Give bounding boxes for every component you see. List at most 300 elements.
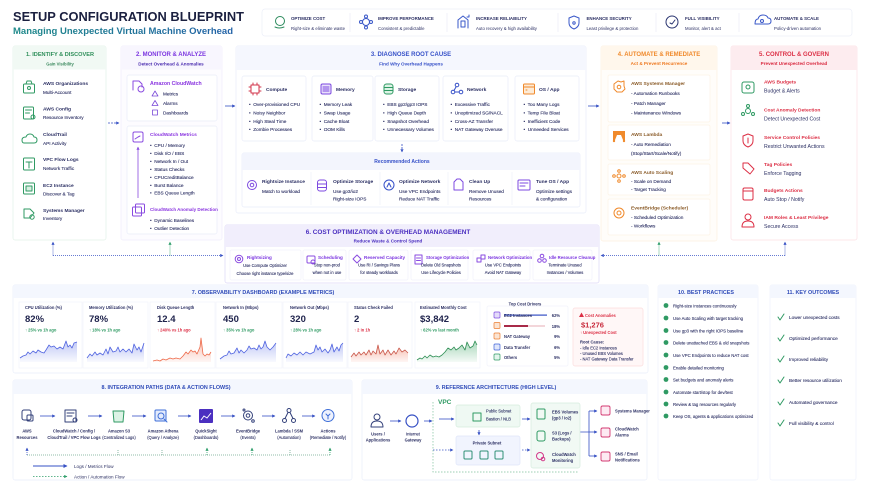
cost anomalies callout <box>573 308 643 366</box>
action: optimize storage <box>318 179 373 202</box>
heading <box>136 52 206 66</box>
metric: memory utilization <box>83 302 148 368</box>
card: AWS Systems Manager: - Patch Manager <box>631 101 666 106</box>
action: rightsize instance <box>248 179 305 194</box>
item: AWS Config <box>24 106 84 120</box>
heading: 9. REFERENCE ARCHITECTURE (HIGH LEVEL) <box>436 385 556 391</box>
panel 11: key outcomes <box>770 285 856 480</box>
arrow: step 4 to step 5 <box>722 122 730 124</box>
VPC boundary: VPC <box>438 399 452 406</box>
top cost drivers: EC2 Instances <box>504 313 533 318</box>
dotted feedback <box>27 448 330 455</box>
node: CloudWatch / Config: CloudTrail / VPC Flow Logs <box>47 435 101 440</box>
card: scheduling: Stop non-prod <box>314 262 341 268</box>
card: AWS Auto Scaling: - Target Tracking <box>631 187 666 192</box>
panel 6: cost optimization <box>225 225 599 283</box>
item: Service Control Policies: Restrict Unwanted Actions <box>764 144 825 150</box>
card: network optimization: Network Optimization <box>488 255 533 260</box>
action: optimize network <box>384 179 441 202</box>
benefit: full visibility: FULL VISIBILITY <box>685 16 720 21</box>
action: optimize network: Reduce NAT Traffic <box>399 196 440 202</box>
VPC boundary <box>433 399 579 472</box>
card: AWS Lambda: AWS Lambda <box>631 132 663 138</box>
metric: disk queue length: 12.4 <box>157 314 176 325</box>
benefit: increase reliability: Auto recovery & high availability <box>476 26 538 31</box>
heading: 11. KEY OUTCOMES <box>787 290 840 296</box>
card: AWS Systems Manager: - Automation Runbooks <box>631 91 680 96</box>
benefit: automate and scale <box>755 15 822 31</box>
item: Service Control Policies: Service Control Policies <box>764 135 820 141</box>
panel 10: best practices: Use gp3 with the right IOPS baseline <box>673 328 744 334</box>
heading <box>759 52 829 66</box>
heading <box>26 52 94 66</box>
card: AWS Auto Scaling: AWS Auto Scaling <box>631 170 673 176</box>
card: OS and app: OS / App <box>539 87 559 93</box>
card: rightsizing <box>230 250 301 280</box>
action: rightsize instance: Match to workload <box>262 189 300 194</box>
top cost drivers: 18% <box>552 324 560 329</box>
item: Systems Manager <box>24 208 85 221</box>
card: compute: • Zombie Processes <box>249 127 293 132</box>
card: CloudWatch Metrics and anomaly detection <box>127 126 218 234</box>
target: Systems Manager <box>601 406 650 415</box>
benefit: automate and scale: Policy-driven automation <box>774 26 822 31</box>
action: optimize network: Use VPC Endpoints <box>399 189 441 194</box>
public subnet <box>456 405 520 427</box>
action: optimize storage: Optimize Storage <box>333 179 373 185</box>
node: AWS resources: AWS <box>22 428 32 434</box>
card: reserved capacity: Reserved Capacity <box>364 255 406 260</box>
action: tune OS and app: Optimize settings <box>536 189 573 194</box>
card: memory: • OOM Kills <box>320 127 345 132</box>
metric: status check failed: 2 <box>354 314 359 325</box>
panel 4: automate and remediate <box>601 46 717 241</box>
card: rightsizing: Rightsizing <box>247 255 272 260</box>
panel 5: control and govern <box>731 46 857 240</box>
benefit: increase reliability: INCREASE RELIABILITY <box>476 16 527 21</box>
card: compute: Compute <box>266 87 287 93</box>
cost anomalies callout: - Idle EC2 Instances <box>580 346 617 350</box>
card: storage optimization: Delete Old Snapshots <box>421 262 461 268</box>
benefit: enhance security: Least privilege & protection <box>586 26 639 31</box>
action: optimize storage: Use gp3/io2 <box>333 189 358 194</box>
card: CloudWatch Metrics and anomaly detection: CloudWatch Anomaly Detection <box>150 207 218 212</box>
action: tune OS and app <box>518 179 573 202</box>
card: CloudWatch Metrics and anomaly detection: CloudWatch Metrics <box>150 132 197 138</box>
card: compute <box>242 76 306 141</box>
node: Amazon Athena: Amazon Athena <box>148 428 179 434</box>
action: tune OS and app: Tune OS / App <box>536 179 569 185</box>
card: compute: • Over-provisioned CPU <box>249 102 301 107</box>
target: CloudWatch Alarms <box>601 426 639 438</box>
card: CloudWatch Metrics and anomaly detection: • Network In / Out <box>150 159 189 164</box>
benefit: improve performance: Consistent & predictable <box>378 26 425 31</box>
heading: 4. AUTOMATE & REMEDIATE <box>618 52 700 58</box>
users: Applications <box>366 438 391 442</box>
panel 10: best practices <box>658 285 758 480</box>
card: AWS Lambda <box>608 125 710 160</box>
panel 8: integration paths <box>13 380 352 480</box>
item: Service Control Policies <box>743 134 825 150</box>
heading <box>306 229 470 244</box>
metric: estimated monthly cost: Estimated Monthly Cost <box>420 305 467 310</box>
metric: network out: 320 <box>290 314 306 325</box>
node: Amazon S3: (Centralized Logs) <box>102 435 136 440</box>
card: Amazon CloudWatch: Amazon CloudWatch <box>150 81 202 87</box>
target: Systems Manager: Systems Manager <box>615 408 650 414</box>
card: network: • Cross-AZ Transfer <box>450 119 493 124</box>
item: VPC Flow Logs: Network Traffic <box>43 166 75 171</box>
node: EventBridge <box>236 409 261 440</box>
benefit: optimize cost: Right-size & eliminate waste <box>291 26 346 31</box>
benefit: enhance security: ENHANCE SECURITY <box>586 16 632 21</box>
card: network optimization: Use VPC Endpoints <box>485 262 521 268</box>
node: Amazon S3 <box>102 411 136 440</box>
item: Systems Manager: Inventory <box>43 216 63 221</box>
outcome labels: Improved reliability <box>789 357 829 362</box>
card: AWS Lambda: - Auto Remediation <box>631 142 671 147</box>
item: Systems Manager: Systems Manager <box>43 208 85 214</box>
action: optimize network: Optimize Network <box>399 179 441 185</box>
item: AWS Budgets <box>742 80 800 94</box>
heading <box>371 52 451 66</box>
metric: network out: ↑ 28% vs 1h ago <box>290 328 322 332</box>
metric: memory utilization: ↑ 18% vs 1h ago <box>89 328 121 332</box>
arrow: left feedback loop <box>53 242 223 256</box>
public subnet: Public Subnet <box>486 408 512 414</box>
item: AWS Organizations <box>24 81 88 95</box>
card: OS and app: • Temp File Bloat <box>524 110 561 116</box>
metric: network out: Network Out (Mbps) <box>290 305 330 310</box>
metric: network in: Network In (Mbps) <box>223 305 259 310</box>
metric: CPU utilization: CPU Utilization (%) <box>25 305 62 310</box>
card: idle resource cleanup: Idle Resource Cleanup <box>549 255 596 260</box>
internet gateway: Internet <box>406 432 421 436</box>
panel 10: best practices: Enable detailed monitoring <box>673 366 724 370</box>
legend: Action / Automation Flow <box>74 474 125 480</box>
flow arrows <box>40 415 315 417</box>
card: storage optimization: Use Lifecycle Policies <box>421 270 461 275</box>
card: storage: • EBS gp2/gp3 IOPS <box>383 102 427 107</box>
metric: disk queue length <box>150 302 215 368</box>
arrow: step 1 to step 2 <box>108 122 119 124</box>
heading: 3. DIAGNOSE ROOT CAUSE <box>371 52 451 58</box>
action: rightsize instance: Rightsize Instance <box>262 179 305 185</box>
card: storage: • Unnecessary Volumes <box>383 127 435 132</box>
card: storage: Storage <box>398 87 416 93</box>
item: AWS Budgets: AWS Budgets <box>764 80 796 86</box>
cost anomalies callout: ↑ Unexpected Cost <box>580 330 617 335</box>
target: SNS / Email: SNS / Email <box>615 452 638 456</box>
card: OS and app <box>515 76 579 141</box>
card: CloudWatch Metrics and anomaly detection: • Disk I/O / EBS <box>150 151 184 156</box>
node: CloudWatch / Config <box>47 410 101 440</box>
public subnet: Bastion / NLB <box>486 416 511 422</box>
card: AWS Auto Scaling <box>608 164 710 195</box>
benefits strip <box>262 9 852 36</box>
panel 10: best practices: Set budgets and anomaly alerts <box>673 378 733 382</box>
node: AWS resources: Resources <box>17 435 38 440</box>
benefit: improve performance <box>360 15 434 31</box>
panel 9: reference architecture <box>362 380 650 480</box>
top cost drivers: 9% <box>554 334 560 339</box>
top cost drivers: 5% <box>554 355 560 360</box>
top cost drivers: 62% <box>552 313 560 318</box>
metric: status check failed: ↑ 2 in 1h <box>354 328 371 332</box>
card: idle resource cleanup <box>533 250 596 280</box>
metric: memory utilization: 78% <box>89 314 109 325</box>
card: scheduling: when not in use <box>313 270 342 275</box>
item: VPC Flow Logs: VPC Flow Logs <box>43 157 79 163</box>
private subnet <box>456 436 520 465</box>
internet gateway: Gateway <box>405 438 422 442</box>
users <box>366 414 391 442</box>
card: OS and app: • Unneeded Services <box>524 127 569 132</box>
metric: estimated monthly cost: $3,842 <box>420 314 449 325</box>
metric: network in: 450 <box>223 314 239 325</box>
item: AWS Budgets: Budget & Alerts <box>764 88 800 94</box>
card: Amazon CloudWatch: Metrics <box>163 92 179 96</box>
action: optimize storage: Right-size IOPS <box>333 196 366 202</box>
item: Budgets Actions <box>743 188 805 203</box>
outcome checks <box>778 314 784 426</box>
panel 10: best practices: Right-size instances continuously <box>673 304 737 308</box>
item: Tag Policies <box>743 162 802 177</box>
card: memory: • Memory Leak <box>320 102 353 107</box>
item: EC2 Instance: Discover & Tag <box>43 192 75 196</box>
arrow: causes to actions <box>401 144 403 152</box>
item: IAM Roles: IAM Roles & Least Privilege <box>764 215 829 221</box>
legend: Logs / Metrics Flow <box>74 464 114 469</box>
item: Cost Anomaly Detection: Detect Unexpected Cost <box>764 116 821 122</box>
arrow: right feedback loop <box>601 242 785 256</box>
metric: status check failed: Status Check Failed <box>354 305 393 310</box>
panel 10: best practices: Keep OS, agents & applications optimized <box>673 414 754 419</box>
card: EventBridge: EventBridge (Scheduler) <box>631 206 688 212</box>
card: idle resource cleanup: Instances / Volumes <box>547 270 583 275</box>
metric: CPU utilization <box>19 302 82 368</box>
node: QuickSight: (Dashboards) <box>194 435 219 440</box>
metric: network in <box>216 302 282 368</box>
item: IAM Roles <box>742 214 829 230</box>
card: network: Network <box>467 87 487 93</box>
heading: 1. IDENTIFY & DISCOVER <box>26 52 94 58</box>
storage and monitoring group: S3 (Logs / <box>552 430 572 436</box>
heading: Gain Visibility <box>46 62 74 66</box>
card: CloudWatch Metrics and anomaly detection: • CPUCreditBalance <box>150 175 194 180</box>
node: actions: Actions <box>320 428 336 434</box>
heading: Reduce Waste & Control Spend <box>354 238 423 244</box>
action: clean up: Clean Up <box>469 179 490 185</box>
card: OS and app: • Inefficient Code <box>524 119 561 124</box>
outcome labels: Better resource utilization <box>789 378 842 383</box>
benefit: full visibility <box>666 16 722 31</box>
node: Amazon S3: Amazon S3 <box>108 428 131 434</box>
heading: 10. BEST PRACTICES <box>678 290 734 296</box>
node: AWS resources <box>17 410 38 440</box>
storage and monitoring group: Monitoring <box>552 458 574 463</box>
panel 10: best practices: Review & tag resources regularly <box>673 402 737 407</box>
node: Amazon Athena <box>147 410 179 440</box>
card: scheduling: Scheduling <box>318 255 343 260</box>
cost anomalies callout: - Unused EBS Volumes <box>580 351 623 356</box>
card: AWS Systems Manager: AWS Systems Manager <box>631 81 685 87</box>
metric: estimated monthly cost <box>415 302 480 368</box>
benefit: enhance security <box>569 16 639 31</box>
card: reserved capacity: Use RI / Savings Plans <box>358 262 400 268</box>
node: QuickSight: QuickSight <box>195 428 217 434</box>
target: SNS / Email: Notifications <box>615 458 641 462</box>
benefit: optimize cost <box>275 16 346 31</box>
arrows <box>390 411 597 456</box>
node: Lambda / SSM: (Automation) <box>277 435 301 440</box>
action: clean up: Remove Unused <box>469 189 504 194</box>
top cost drivers: Data Transfer <box>504 345 531 350</box>
action: tune OS and app: & configuration <box>536 196 568 202</box>
node: QuickSight <box>194 409 219 440</box>
benefit: automate and scale: AUTOMATE & SCALE <box>774 16 819 21</box>
item: Tag Policies: Enforce Tagging <box>764 171 802 177</box>
action: clean up: Resources <box>469 196 492 202</box>
target: CloudWatch Alarms: CloudWatch <box>615 426 639 432</box>
panel 2: monitor and analyze <box>121 46 222 240</box>
storage and monitoring group: Backups) <box>552 436 571 442</box>
metric: estimated monthly cost: ↑ 62% vs last month <box>420 328 459 332</box>
title: SETUP CONFIGURATION BLUEPRINT <box>13 9 244 24</box>
outcome labels: Lower unexpected costs <box>789 315 840 320</box>
card: CloudWatch Metrics and anomaly detection: • Dynamic Baselines <box>150 218 195 223</box>
users: Users / <box>371 432 386 436</box>
node: CloudWatch / Config: CloudWatch / Config / <box>53 428 96 434</box>
benefit: increase reliability <box>458 15 538 31</box>
cost anomalies callout: Root Cause: <box>580 340 604 344</box>
item: AWS Config: Resource Inventory <box>43 115 84 120</box>
check list <box>664 303 668 418</box>
card: Amazon CloudWatch <box>127 75 217 121</box>
heading: 6. COST OPTIMIZATION & OVERHEAD MANAGEMENT <box>306 229 470 236</box>
top cost drivers: NAT Gateway <box>504 334 531 339</box>
node: Amazon Athena: (Query / Analyze) <box>147 435 179 440</box>
storage and monitoring group: (gp3 / io2) <box>552 416 572 420</box>
arrow: step 3 to step 4 <box>588 105 599 107</box>
metric: CPU utilization: 82% <box>25 314 45 325</box>
outcome labels: Optimized performance <box>789 336 838 341</box>
card: AWS Systems Manager <box>608 75 710 122</box>
card: network <box>443 76 508 141</box>
heading: Act & Prevent Recurrence <box>631 61 688 66</box>
card: CloudWatch Metrics and anomaly detection: • Burst Balance <box>150 183 184 188</box>
item: AWS Organizations: AWS Organizations <box>43 81 88 87</box>
card: storage <box>375 76 439 141</box>
heading: Detect Overhead & Anomalies <box>138 62 204 66</box>
private subnet: Private Subnet <box>473 440 502 446</box>
heading: 7. OBSERVABILITY DASHBOARD (EXAMPLE METRICS) <box>192 290 334 296</box>
benefit: full visibility: Monitor, alert & act <box>685 26 722 31</box>
item: Tag Policies: Tag Policies <box>764 162 792 168</box>
panel 10: best practices: Use Auto Scaling with target tracking <box>673 316 744 321</box>
card: compute: • Noisy Neighbor <box>249 110 286 116</box>
card: rightsizing: Choose right instance type/size <box>237 271 294 276</box>
item: Cost Anomaly Detection <box>742 104 821 122</box>
card: memory: • Cache Bloat <box>320 119 350 124</box>
card: OS and app: • Too Many Logs <box>524 102 560 107</box>
node: actions: (Remediate / Notify) <box>310 435 347 440</box>
card: network: • NAT Gateway Overuse <box>450 127 503 132</box>
storage and monitoring group: CloudWatch <box>552 452 576 457</box>
metric: disk queue length: Disk Queue Length <box>157 305 195 310</box>
internet gateway <box>405 415 422 442</box>
card: scheduling <box>303 250 346 280</box>
item: CloudTrail: API Activity <box>43 141 67 146</box>
card: CloudWatch Metrics and anomaly detection: • CPU / Memory <box>150 143 186 148</box>
panel 7: observability dashboard <box>13 285 648 373</box>
item: EC2 Instance <box>24 183 75 196</box>
top cost drivers: Top Cost Drivers <box>509 302 542 306</box>
card: storage optimization: Storage Optimization <box>426 255 470 260</box>
card: storage: • High Queue Depth <box>383 110 426 116</box>
item: AWS Config: AWS Config <box>43 106 71 112</box>
card: reserved capacity <box>349 250 408 280</box>
top cost drivers: 6% <box>554 345 560 350</box>
item: CloudTrail: CloudTrail <box>43 132 68 138</box>
item: Cost Anomaly Detection: Cost Anomaly Detection <box>764 108 820 114</box>
card: Amazon CloudWatch: Dashboards <box>163 110 189 116</box>
item: VPC Flow Logs <box>24 157 79 171</box>
panel 10: best practices: Delete unattached EBS & old snapshots <box>673 340 749 346</box>
outcome labels: Full visibility & control <box>789 421 834 426</box>
benefit: improve performance: IMPROVE PERFORMANCE <box>378 16 434 21</box>
item: Budgets Actions: Auto Stop / Notify <box>764 197 805 203</box>
card: rightsizing: Use Compute Optimizer <box>243 263 287 268</box>
heading: Prevent Unexpected Overhead <box>761 61 828 66</box>
storage and monitoring group <box>531 403 580 468</box>
card: compute: • High Steal Time <box>249 119 287 124</box>
card: CloudWatch Metrics and anomaly detection: • Status Checks <box>150 167 185 172</box>
cost anomalies callout: $1,276 <box>581 320 604 330</box>
heading: Find Why Overhead Happens <box>379 62 443 66</box>
card: AWS Systems Manager: - Maintenance Windows <box>631 110 682 116</box>
top cost drivers <box>487 302 568 366</box>
card: memory: Memory <box>336 87 355 93</box>
item: CloudTrail <box>22 132 68 146</box>
card: network: • Unoptimized SG/NACL <box>450 110 503 116</box>
panel 3: diagnose root cause <box>236 46 586 213</box>
heading: 5. CONTROL & GOVERN <box>759 52 829 58</box>
legend <box>33 464 125 480</box>
cost anomalies callout: Cost Anomalies <box>585 313 617 318</box>
card: memory <box>312 76 373 141</box>
card: network optimization: Avoid NAT Gateway <box>485 270 522 275</box>
heading: 2. MONITOR & ANALYZE <box>136 52 206 58</box>
recommended actions <box>242 153 580 207</box>
item: Budgets Actions: Budgets Actions <box>764 188 803 194</box>
metric: CPU utilization: ↑ 25% vs 1h ago <box>25 328 57 332</box>
item: EC2 Instance: EC2 Instance <box>43 183 74 189</box>
card: storage: • Snapshot Overhead <box>383 119 429 124</box>
metric: disk queue length: ↑ 240% vs 1h ago <box>157 328 191 332</box>
panel 10: best practices: Use VPC Endpoints to reduce NAT cost <box>673 353 749 358</box>
heading: 8. INTEGRATION PATHS (DATA & ACTION FLOWS) <box>101 385 231 391</box>
card: Amazon CloudWatch: Alarms <box>163 101 178 106</box>
node: Lambda / SSM: Lambda / SSM <box>275 428 304 434</box>
outcome labels <box>789 315 842 426</box>
action: clean up <box>454 179 504 202</box>
panel 10: best practices: Automate start/stop for dev/test <box>673 390 734 395</box>
target: CloudWatch Alarms: Alarms <box>615 432 630 438</box>
card: EventBridge: - Scheduled Optimization <box>631 215 684 220</box>
metric: network out <box>283 302 347 368</box>
card: AWS Lambda: (Stop/Start/Scale/Notify) <box>631 151 682 156</box>
